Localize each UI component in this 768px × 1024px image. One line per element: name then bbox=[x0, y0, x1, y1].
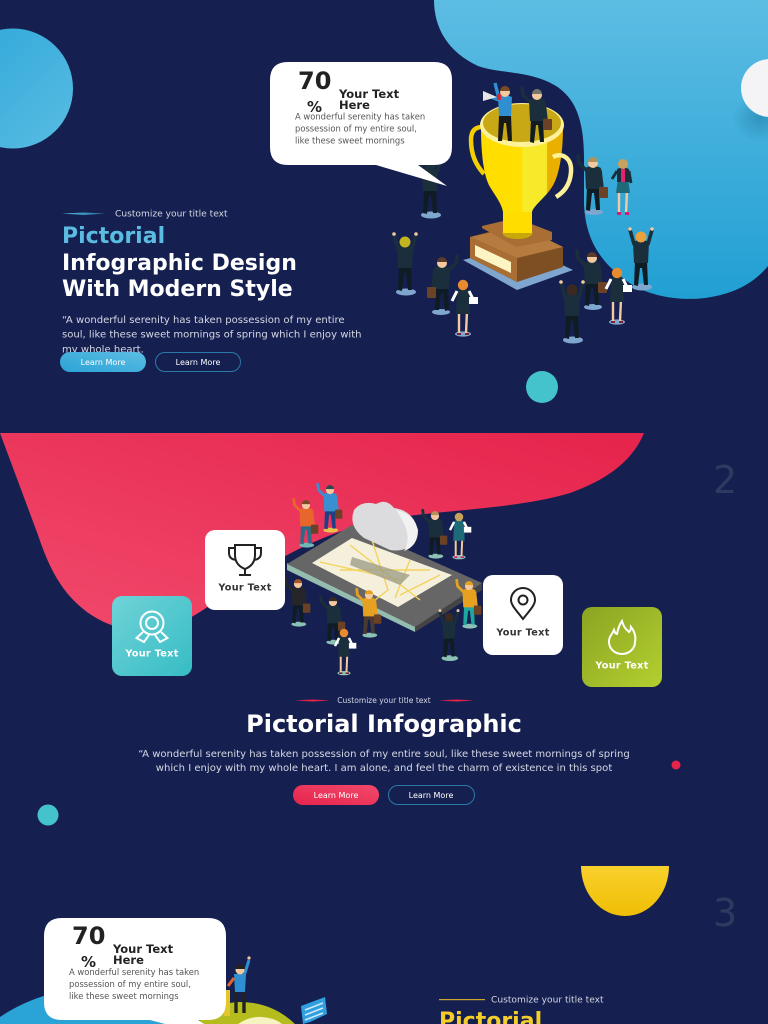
icon: flame bbox=[609, 621, 635, 654]
bubble text: like these sweet mornings bbox=[295, 136, 405, 146]
olive hill bbox=[197, 1002, 295, 1024]
stat: 70%: 70 bbox=[298, 67, 331, 95]
bubble heading: Your Text bbox=[112, 942, 174, 956]
eyebrow line bbox=[62, 212, 106, 215]
heading accent: Pictorial bbox=[62, 224, 165, 249]
tablet body bbox=[287, 525, 482, 627]
trophy-like light ellipse bbox=[238, 1017, 282, 1024]
eyebrow: Customize your title text bbox=[115, 210, 228, 220]
heading bbox=[62, 251, 297, 302]
decorative dot: red bbox=[672, 760, 680, 770]
paragraph: “A wonderful serenity has taken possession of my entire soul, like these sweet mornings of spring bbox=[138, 749, 630, 760]
button outline: Learn More bbox=[409, 791, 453, 800]
decorative circle: white right bbox=[741, 59, 768, 117]
red blob bbox=[0, 433, 644, 631]
decorative circle: teal small bbox=[38, 804, 58, 826]
decorative half circle: yellow bbox=[581, 866, 669, 916]
section number 2: 2 bbox=[713, 458, 737, 502]
icon: rosette bbox=[136, 612, 168, 642]
person with briefcase on trophy bbox=[522, 88, 552, 147]
button filled: Learn More bbox=[81, 358, 125, 367]
person waving bbox=[228, 956, 251, 1013]
eyebrow lines bbox=[294, 700, 474, 702]
button filled bbox=[293, 785, 379, 805]
bubble text: A wonderful serenity has taken bbox=[295, 112, 425, 122]
paragraph: my whole heart. bbox=[62, 344, 144, 356]
bubble text bbox=[295, 112, 425, 146]
icon: trophy bbox=[229, 545, 261, 575]
icon: map pin bbox=[511, 588, 535, 619]
section number 3: 3 bbox=[713, 891, 737, 935]
button outline bbox=[156, 352, 240, 372]
trophy cup bbox=[502, 227, 532, 239]
eyebrow line bbox=[439, 999, 485, 1000]
bubble heading bbox=[112, 942, 174, 967]
section 1 text block bbox=[60, 210, 362, 372]
people around trophy bbox=[578, 156, 608, 215]
card: flame: Your Text bbox=[594, 660, 649, 672]
cloud bbox=[352, 502, 417, 550]
button outline: Learn More bbox=[176, 358, 220, 367]
map roads bbox=[320, 540, 440, 600]
illustration: tablet map bbox=[286, 484, 482, 675]
white circle shadow bbox=[732, 94, 768, 142]
heading: With Modern Style bbox=[62, 277, 293, 302]
heading: Infographic Design bbox=[62, 251, 297, 276]
card: flame bbox=[582, 607, 662, 687]
illustration: trophy with people bbox=[392, 83, 654, 344]
bubble text: possession of my entire soul, bbox=[295, 124, 417, 134]
trophy base mat bbox=[463, 245, 573, 290]
tablet edge bbox=[415, 583, 482, 632]
bubble heading: Here bbox=[339, 98, 370, 112]
person behind bubble bbox=[417, 155, 443, 218]
section 2 text block bbox=[138, 696, 630, 805]
person with megaphone on trophy bbox=[483, 83, 512, 141]
card: location: Your Text bbox=[495, 628, 550, 638]
card: trophy: Your Text bbox=[217, 582, 272, 594]
map screen bbox=[312, 538, 452, 607]
stat: 70%: 70 bbox=[72, 922, 105, 950]
button outline bbox=[388, 786, 474, 804]
bubble text: possession of my entire soul, bbox=[69, 979, 191, 989]
bubble heading bbox=[338, 87, 400, 112]
tablet side bbox=[287, 563, 415, 632]
paragraph bbox=[138, 749, 630, 774]
paragraph: soul, like these sweet mornings of spring which I enjoy with bbox=[62, 330, 362, 340]
illustration: section 3 hill bbox=[0, 956, 327, 1024]
bubble text: like these sweet mornings bbox=[69, 991, 179, 1001]
blue blob: top right bbox=[434, 0, 768, 299]
card: award: Your Text bbox=[124, 648, 179, 660]
eyebrow: Customize your title text bbox=[491, 996, 604, 1006]
speech bubble 1 bbox=[270, 62, 452, 186]
decorative circle: top left bbox=[0, 28, 73, 148]
icon: speech lines bbox=[301, 997, 327, 1024]
person small bbox=[224, 990, 230, 1016]
eyebrow: Customize your title text bbox=[337, 696, 431, 705]
blue blob bbox=[0, 994, 200, 1024]
map shaded area bbox=[350, 557, 410, 585]
woman pink bbox=[612, 159, 631, 215]
card: trophy bbox=[205, 530, 285, 610]
stat: 70% bbox=[72, 922, 105, 971]
speech bubble 2 bbox=[44, 918, 226, 1024]
stat: 70%: % bbox=[81, 953, 96, 971]
stat: 70% bbox=[298, 67, 331, 116]
heading: Pictorial Infographic bbox=[246, 710, 522, 738]
button filled bbox=[60, 352, 146, 372]
paragraph bbox=[62, 315, 362, 356]
paragraph: which I enjoy with my whole heart. I am alone, and feel the charm of existence in this spot bbox=[156, 763, 612, 774]
button filled: Learn More bbox=[314, 791, 358, 800]
section 3 text block bbox=[439, 996, 604, 1024]
stat: 70%: % bbox=[307, 98, 322, 116]
card: award bbox=[112, 596, 192, 676]
bubble heading: Here bbox=[113, 953, 144, 967]
decorative circle: teal bbox=[526, 371, 558, 403]
bubble text: A wonderful serenity has taken bbox=[69, 967, 199, 977]
people on tablet scene bbox=[286, 484, 481, 675]
paragraph: “A wonderful serenity has taken possession of my entire bbox=[62, 315, 345, 326]
card: location bbox=[483, 575, 563, 655]
bubble text bbox=[69, 967, 199, 1001]
bubble heading: Your Text bbox=[338, 87, 400, 101]
trophy base bbox=[470, 224, 563, 282]
